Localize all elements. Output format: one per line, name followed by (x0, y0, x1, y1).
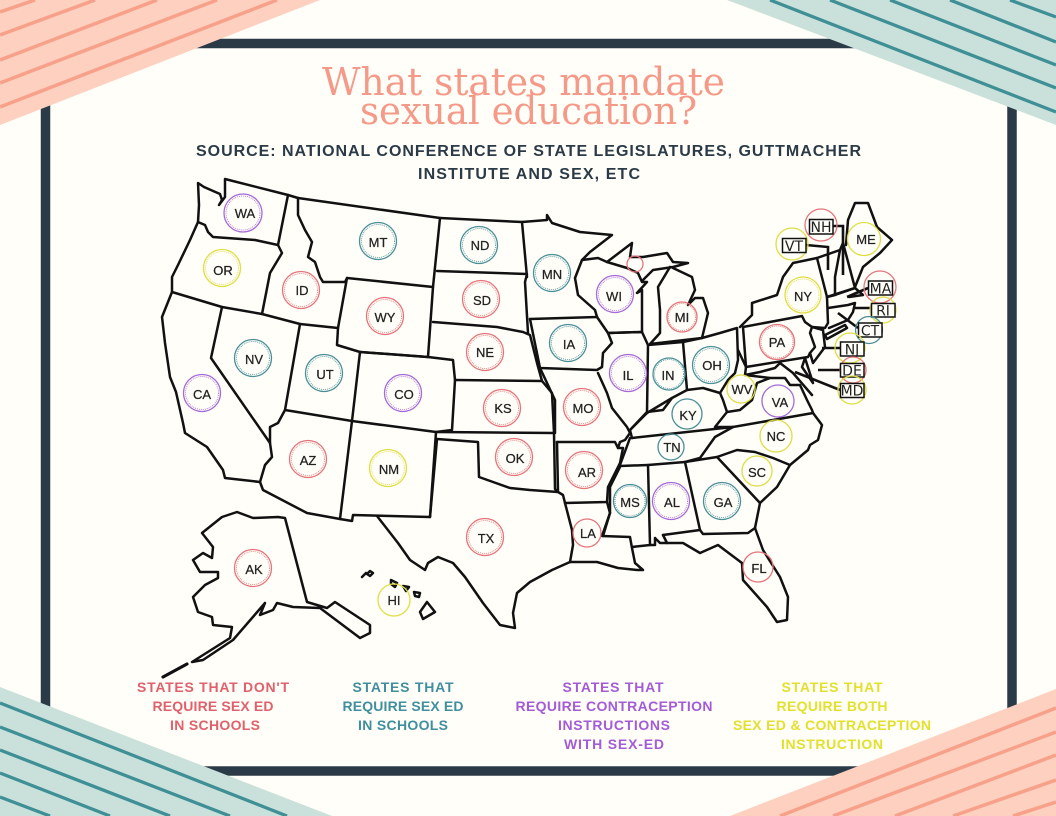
marker: NC: NC (767, 429, 785, 444)
marker: ME: ME (856, 232, 876, 247)
marker: ME (848, 222, 880, 256)
marker: WY (366, 298, 404, 334)
marker: KY (672, 399, 702, 429)
marker: SC (742, 456, 772, 486)
marker: SC: SC (748, 465, 766, 480)
marker: AZ: AZ (300, 453, 316, 468)
marker: KS (484, 390, 520, 426)
marker: CA (184, 374, 220, 412)
marker: WV (727, 375, 755, 403)
marker: SD: SD (473, 293, 491, 308)
label: NH (805, 209, 837, 241)
marker: NV (234, 340, 272, 376)
marker: GA (704, 482, 740, 520)
marker: LA: LA (580, 526, 596, 541)
marker: TX (466, 518, 504, 556)
label: NH: NH (810, 220, 832, 236)
marker: CO (384, 374, 422, 412)
legend: contraception instruction: REQUIRE CONTRACEPTION (516, 698, 712, 714)
marker: AK: AK (245, 562, 263, 577)
marker: MI: MI (675, 310, 689, 325)
marker: OR: OR (213, 263, 233, 278)
marker: TN: TN (663, 440, 681, 455)
state markers (184, 194, 880, 616)
legend: no requirement: REQUIRE SEX ED (152, 698, 274, 714)
corner: bottom right salmon stripes (730, 689, 1056, 816)
label: VT: VT (785, 239, 804, 255)
marker: WA (224, 194, 262, 232)
marker: AL: AL (664, 495, 680, 510)
marker: KY: KY (679, 408, 697, 423)
marker: WV: WV (732, 382, 753, 397)
marker: ND: ND (471, 238, 489, 253)
legend: both: INSTRUCTION (781, 736, 883, 752)
marker: UT: UT (316, 367, 334, 382)
marker: NE: NE (476, 345, 494, 360)
marker: FL: FL (751, 561, 767, 576)
marker: ID (282, 272, 320, 308)
marker: WI: WI (606, 289, 622, 304)
corner: bottom left teal stripes (0, 687, 332, 816)
marker: MO (564, 388, 600, 426)
boxed labels northeast (776, 209, 896, 404)
marker: UT (306, 354, 342, 392)
legend: require sex ed: STATES THAT (352, 679, 454, 695)
marker: AZ (290, 440, 326, 478)
marker: WY: WY (375, 310, 396, 325)
label: MD: MD (841, 384, 863, 400)
marker: MS: MS (620, 495, 640, 510)
marker: CA: CA (193, 387, 211, 402)
label: NJ: NJ (845, 342, 859, 358)
marker: MS (614, 484, 646, 518)
legend: both: REQUIRE BOTH (776, 698, 888, 714)
title: sexual education? (360, 89, 697, 133)
marker: GA: GA (714, 495, 733, 510)
US map outline (162, 179, 892, 677)
marker: PA: PA (769, 335, 786, 350)
marker: IA: IA (563, 337, 575, 352)
marker: IA (550, 324, 586, 362)
marker: AR: AR (578, 465, 596, 480)
marker: NC (760, 420, 792, 452)
leader lines for northeast labels (795, 226, 871, 390)
label: VT (776, 228, 808, 260)
marker: TX: TX (478, 531, 495, 546)
marker: MN: MN (542, 267, 562, 282)
legend: both: STATES THAT (782, 679, 883, 695)
legend: no requirement: IN SCHOOLS (170, 717, 260, 733)
marker: HI (378, 584, 410, 616)
marker: AK (234, 550, 272, 586)
label: RI (870, 297, 896, 323)
marker: OH: OH (702, 358, 722, 373)
label: NJ (835, 333, 865, 363)
corner: top left salmon stripes (0, 0, 320, 125)
label: MA: MA (870, 282, 892, 298)
marker: upper Michigan (627, 256, 643, 272)
label: CT (856, 316, 882, 344)
corner: top right teal stripes (727, 0, 1056, 125)
marker: KS: KS (494, 401, 512, 416)
marker: MT: MT (369, 235, 387, 250)
marker: NE (466, 334, 504, 370)
marker: NM (370, 450, 406, 486)
marker: NM: NM (379, 462, 399, 477)
legend: contraception instruction: INSTRUCTIONS (558, 717, 670, 733)
label: MA (864, 271, 896, 303)
marker: VA (762, 385, 794, 417)
marker: NY (785, 277, 821, 313)
marker: FL (743, 552, 773, 582)
legend: contraception instruction: STATES THAT (562, 679, 664, 695)
label: DE: DE (842, 364, 862, 380)
marker: ID: ID (296, 283, 308, 298)
marker: MI (667, 302, 697, 332)
legend: require sex ed: IN SCHOOLS (358, 717, 448, 733)
marker: LA (573, 519, 601, 547)
legend: contraception instruction: WITH SEX-ED (564, 736, 664, 752)
legend: require sex ed: REQUIRE SEX ED (342, 698, 464, 714)
subtitle: source (196, 143, 861, 183)
subtitle: source: SOURCE: NATIONAL CONFERENCE OF STATE LEGISLATURES, GUTTMACHER (196, 143, 861, 160)
title: What states mandate (322, 60, 725, 104)
marker: IL: IL (623, 368, 633, 383)
label: MD (838, 376, 866, 404)
label: DE (840, 357, 866, 383)
legend: no requirement: STATES THAT DON'T (137, 679, 289, 695)
marker: AR (566, 452, 602, 488)
marker: IL (610, 354, 646, 392)
marker: TN (658, 434, 684, 460)
marker: NY: NY (794, 289, 812, 304)
marker: VA: VA (772, 395, 789, 410)
marker: SD (462, 280, 500, 318)
marker: OH (692, 346, 730, 384)
marker: CO: CO (394, 387, 414, 402)
subtitle: source: INSTITUTE AND SEX, ETC (418, 166, 640, 183)
marker: AL (652, 482, 690, 520)
marker: MN (534, 254, 570, 292)
marker: PA (760, 324, 794, 360)
legend: both (733, 679, 931, 752)
marker: WA: WA (235, 206, 256, 221)
legend: no requirement (137, 679, 289, 733)
marker: IN: IN (662, 368, 674, 383)
marker: NV: NV (245, 352, 263, 367)
marker: MT (360, 222, 396, 260)
legend: both: SEX ED & CONTRACEPTION (733, 717, 931, 733)
marker: HI: HI (388, 593, 400, 608)
legend: contraception instruction (516, 679, 712, 752)
marker: WI (596, 276, 634, 312)
marker: ND (460, 226, 498, 264)
marker: OK (496, 438, 532, 476)
title (322, 60, 725, 133)
marker: OK: OK (506, 451, 525, 466)
label: RI: RI (876, 304, 890, 320)
marker: IN (653, 358, 685, 390)
marker: MO: MO (573, 401, 593, 416)
label: CT: CT (861, 324, 880, 340)
marker: OR (204, 250, 240, 286)
legend: require sex ed (342, 679, 464, 733)
